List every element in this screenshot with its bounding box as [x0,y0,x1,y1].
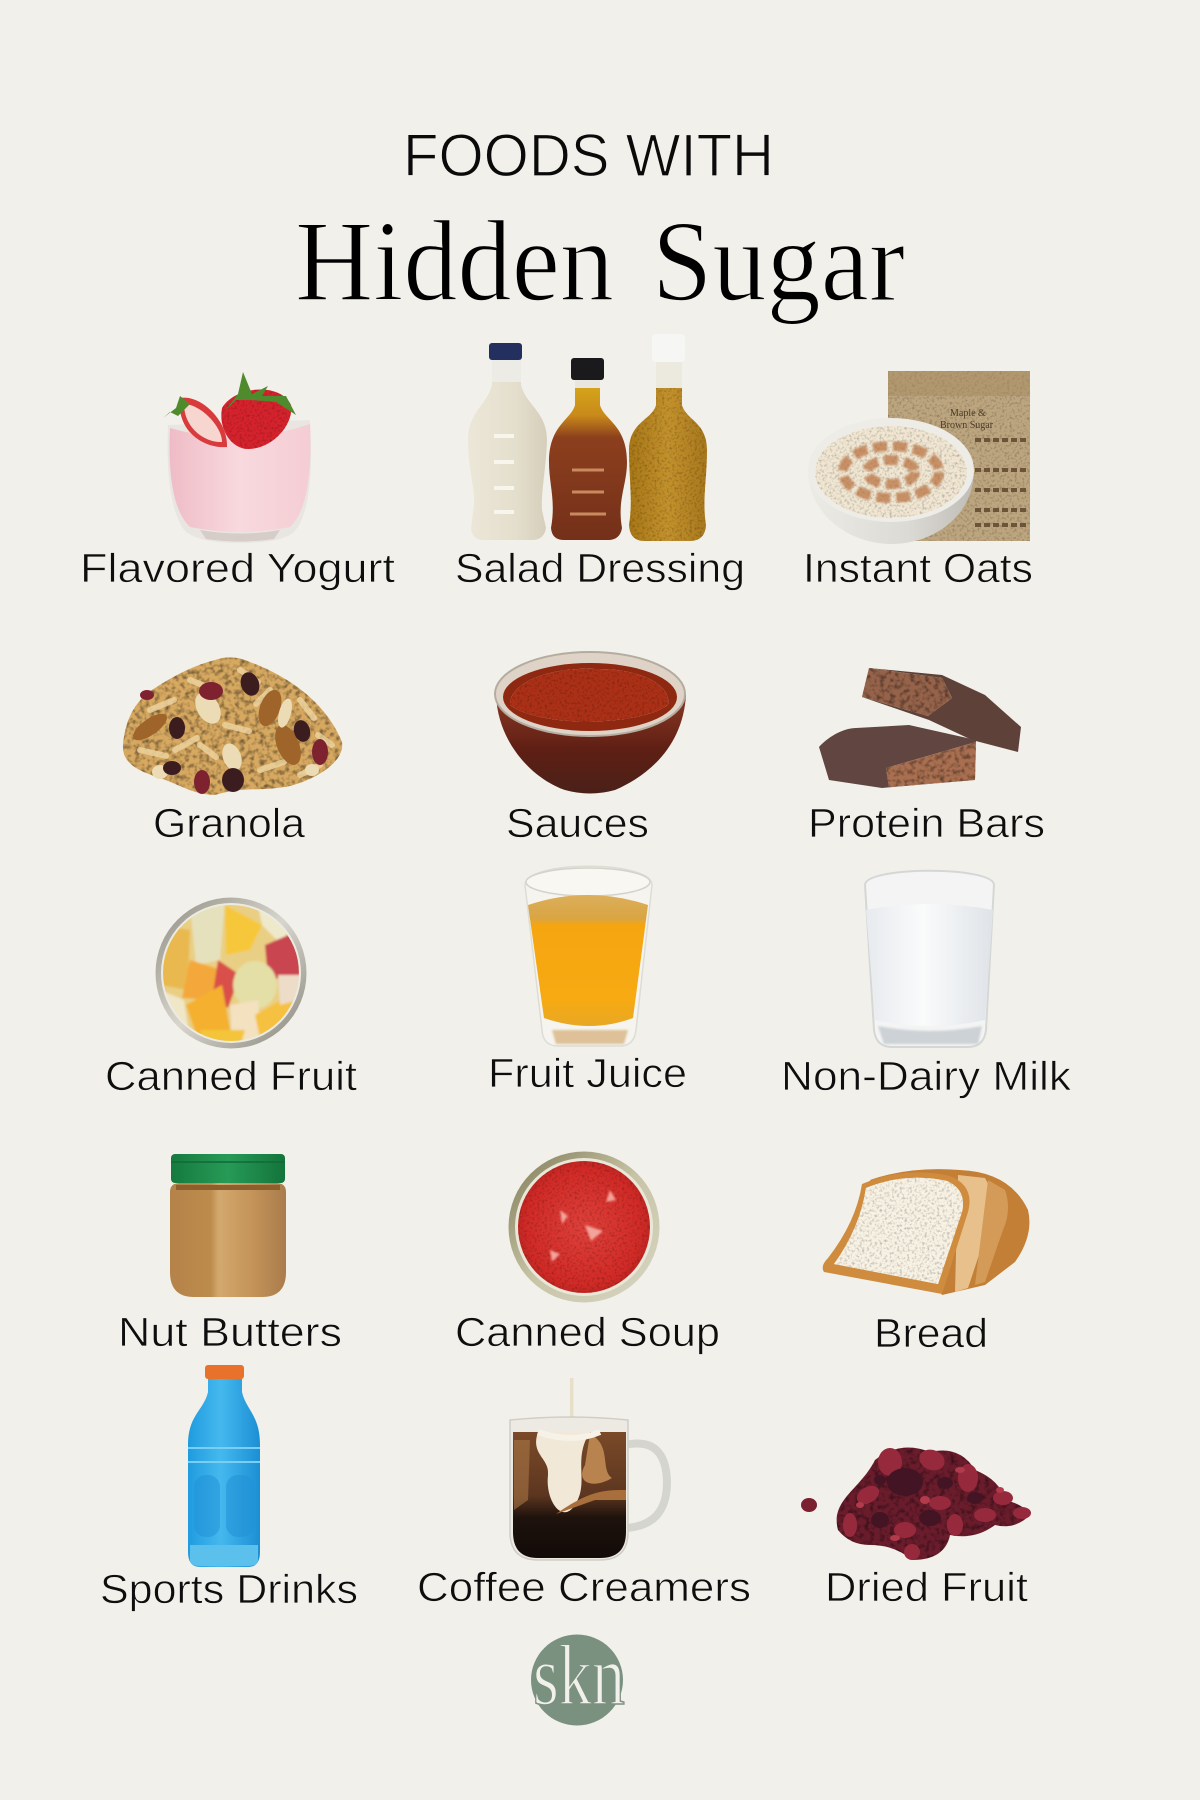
label: Sports Drinks [100,1566,358,1612]
label: Dried Fruit [825,1564,1029,1610]
icon: oat packet [888,371,1030,541]
icon: granola pile [123,657,342,795]
icon: sauce bowl [495,652,686,794]
panel: dried fruit [801,1446,1031,1610]
icon: strawberry yogurt glass [163,372,311,543]
panel: sauces [495,652,686,846]
heading: hidden sugar: Hidden [295,198,614,326]
label: salad dressing: Salad Dressing [455,545,745,591]
heading: hidden sugar: Sugar [652,198,905,326]
icon: iced coffee mug with cream [510,1378,667,1560]
logo: skn [533,1627,625,1723]
label: Canned Fruit [105,1053,358,1099]
panel: canned fruit [105,898,358,1099]
panel: granola [123,657,342,846]
label: Coffee Creamers [417,1564,751,1610]
icon: honey mustard bottle [629,334,707,541]
icon: blue sports drink bottle [188,1365,260,1567]
panel: flavored yogurt [80,372,396,591]
label: Fruit Juice [488,1050,687,1096]
label: Nut Butters [118,1309,342,1355]
panel: canned soup [455,1152,720,1355]
label: Bread [874,1310,988,1356]
icon: oat packet: Brown Sugar [940,420,994,431]
label: Canned Soup [455,1309,720,1355]
panel: sports drinks [100,1365,358,1612]
icon: oat packet: Maple & [950,408,986,419]
panel: bread [823,1169,1029,1356]
panel: fruit juice [488,866,687,1096]
icon: peanut butter jar [170,1154,286,1297]
icon: vinaigrette bottle [549,358,627,540]
label: Granola [153,800,305,846]
panel: instant oats [808,371,1030,544]
heading: hidden sugar [295,198,905,326]
panel: non-dairy milk [781,871,1072,1099]
icon: chocolate bars [819,668,1021,788]
label: Non-Dairy Milk [781,1053,1072,1099]
label: instant oats: Instant Oats [803,545,1033,591]
icon: sliced bread loaf [823,1169,1029,1295]
panel: nut butters [118,1154,342,1355]
icon: can of fruit [156,898,306,1048]
label: Sauces [506,800,649,846]
icon: can of tomato soup [508,1152,660,1302]
icon: creamy bottle [468,343,547,540]
panel: salad dressing [468,334,707,541]
heading: foods with: FOODS WITH [403,122,774,189]
title [295,122,905,326]
label: Flavored Yogurt [80,545,396,591]
panel: protein bars [808,668,1045,846]
icon: glass of milk [865,871,994,1047]
label: Protein Bars [808,800,1045,846]
panel: coffee creamers [417,1378,751,1610]
icon: dried cranberries [801,1446,1031,1560]
icon: glass of orange juice [525,866,652,1046]
icon: oatmeal bowl [808,418,974,544]
